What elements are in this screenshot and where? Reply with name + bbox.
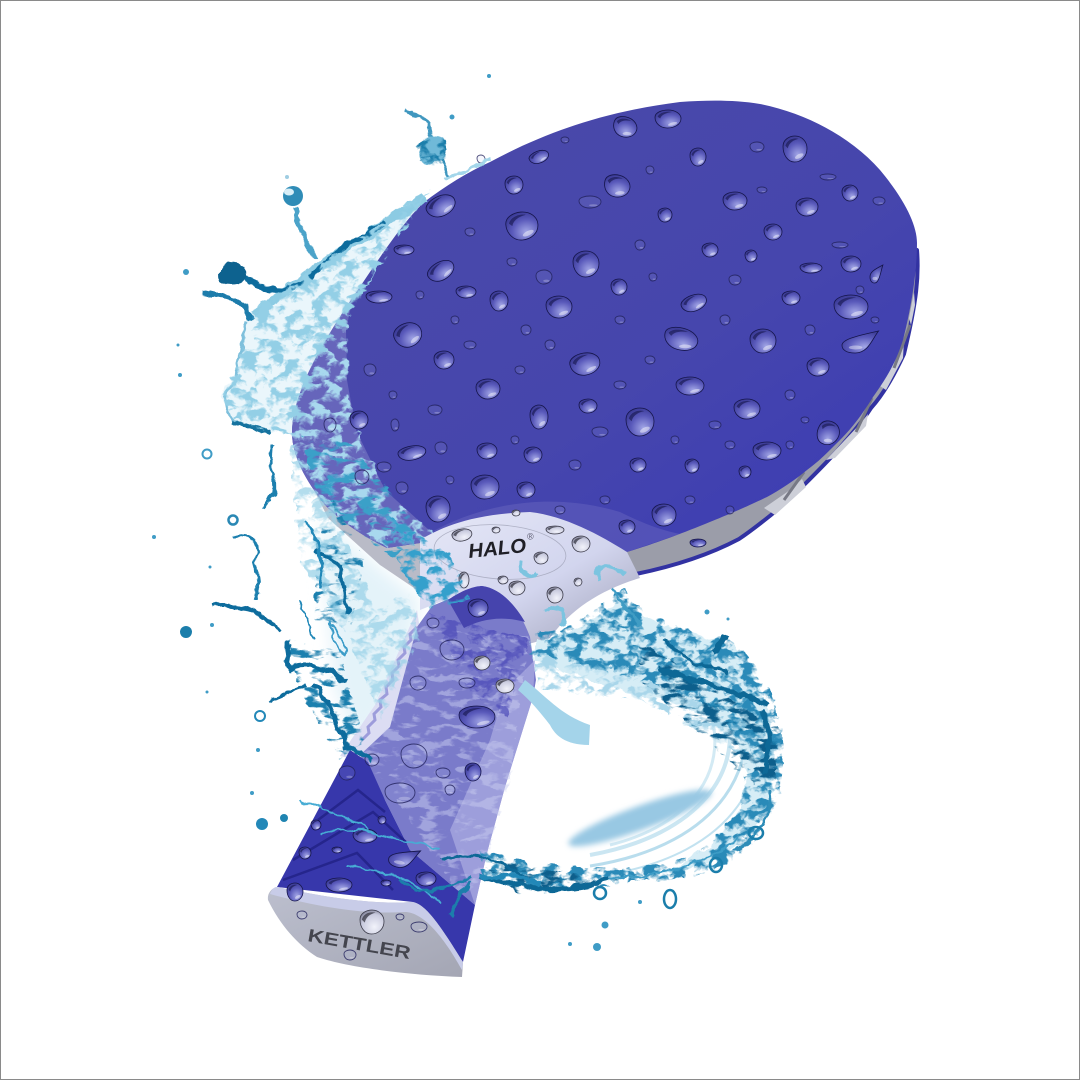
pale cloud in swirl xyxy=(564,781,716,855)
bat blade face xyxy=(292,101,917,552)
concentric ripple arcs xyxy=(590,690,760,876)
water clump at top xyxy=(418,135,448,165)
blade highlight xyxy=(430,502,680,552)
pale upper streaks xyxy=(530,630,770,760)
water drops on blade xyxy=(324,110,885,547)
scattered droplets xyxy=(152,74,730,951)
curling arm xyxy=(240,222,385,290)
handle xyxy=(277,586,536,962)
bat rim with grey ribs xyxy=(305,250,918,592)
logo: HALO: ® xyxy=(527,531,535,542)
light streak from handle xyxy=(518,680,590,745)
pale outer band xyxy=(340,610,420,762)
ball droplet xyxy=(283,186,303,206)
sawtooth edge xyxy=(362,627,417,740)
strands over lower handle xyxy=(300,800,540,915)
mottled swirl band xyxy=(480,590,783,891)
water over throat xyxy=(385,515,470,610)
left blade edge washed by water xyxy=(292,297,440,560)
water curls on throat xyxy=(522,562,625,625)
mid section xyxy=(360,586,536,905)
logo: HALO: HALO xyxy=(467,535,528,563)
splash sheet mottling xyxy=(222,190,430,436)
water haze behind the bat xyxy=(222,195,760,870)
brand: KETTLER: KETTLER xyxy=(306,925,412,963)
lower left rim xyxy=(305,472,430,592)
right swirl xyxy=(480,590,783,908)
lower left strands xyxy=(212,445,372,760)
pale upper wash xyxy=(535,600,774,874)
lower left mottled strands xyxy=(315,500,365,625)
drips xyxy=(594,827,763,908)
top tab xyxy=(448,586,525,628)
end cap xyxy=(268,887,463,977)
chevron grip ridges xyxy=(283,790,407,890)
solid lower grip xyxy=(277,750,475,962)
dark edge strokes xyxy=(480,590,770,889)
left splash xyxy=(203,108,625,760)
tendril at top xyxy=(203,108,490,432)
water drops on throat, handle and cap xyxy=(287,510,590,960)
throat of the bat xyxy=(420,512,640,645)
